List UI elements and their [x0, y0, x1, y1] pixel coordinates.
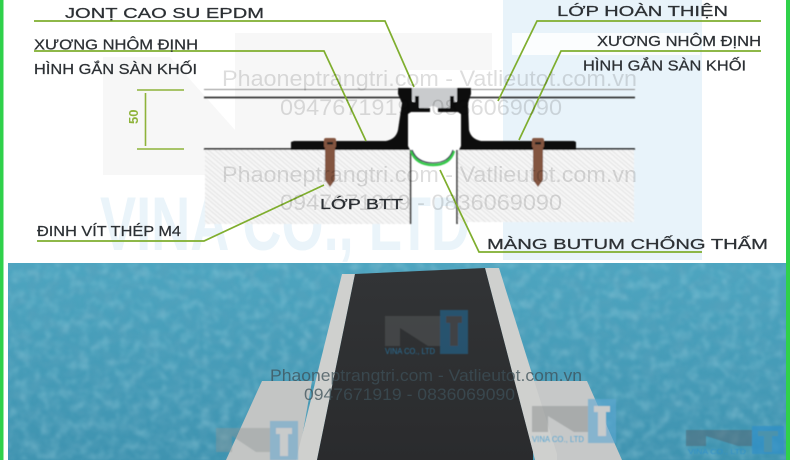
- diagram watermark text: Phaoneptrangtri.com - Vatlieutot.com.vn: [222, 162, 637, 187]
- aluminium strip right: [485, 268, 557, 460]
- background logo watermark: VINA CO., LTD: [100, 182, 470, 267]
- label: aluminium profile right line 2: HÌNH GẮN SÀN KHỐI: [583, 56, 746, 74]
- logo lower middle: VINA CO., LTD: [532, 435, 584, 444]
- black rubber insert: [317, 268, 533, 460]
- label: finish layer: LỚP HOÀN THIỆN: [557, 3, 728, 20]
- photo logos: [216, 310, 784, 460]
- photo watermark text: Phaoneptrangtri.com - Vatlieutot.com.vn: [270, 366, 582, 385]
- background logo watermark: [100, 0, 702, 267]
- finish layer lines right: [468, 90, 635, 149]
- EPDM rubber joint: [411, 88, 458, 108]
- screw right: [532, 138, 544, 187]
- logo on rubber: [385, 310, 468, 356]
- aluminium base plate right: [518, 381, 622, 460]
- concrete slab left: [205, 150, 410, 224]
- diagram watermark text: 0947671919 - 0836069090: [280, 190, 562, 215]
- label: aluminium profile right line 1: XƯƠNG NHÔM ĐỊNH: [597, 33, 761, 50]
- logo lower right: VINA CO., LTD: [688, 449, 746, 456]
- aluminium strip left: [296, 274, 355, 460]
- logo on rubber: VINA CO., LTD: [385, 347, 435, 356]
- label: aluminium profile left line 1: XƯƠNG NHÔM ĐỊNH: [34, 36, 198, 54]
- concrete slab right: [457, 150, 634, 222]
- carpet background: [8, 263, 786, 460]
- logo lower right: [686, 426, 784, 456]
- waterproof membrane: [411, 150, 454, 165]
- dimension 50: [126, 90, 184, 149]
- logo lower middle: [532, 399, 616, 444]
- technical section diagram: [204, 88, 635, 224]
- aluminium profile right: [438, 88, 576, 150]
- label: steel screw: ĐINH VÍT THÉP M4: [37, 223, 181, 240]
- label: aluminium profile left line 2: HÌNH GẮN SÀN KHỐI: [34, 60, 197, 78]
- label: EPDM joint: JONṬ CAO SU EPDM: [65, 5, 264, 22]
- leader lines: [34, 21, 761, 252]
- photo watermark text: [270, 366, 582, 404]
- expansion gap walls: [410, 150, 457, 224]
- label: bitumen membrane: MÀNG BUTUM CHỐNG THẤM: [487, 235, 768, 253]
- diagram watermark text: [222, 66, 637, 215]
- dimension 50: 50: [126, 110, 141, 124]
- finish layer lines left: [204, 90, 400, 149]
- screw left: [324, 138, 336, 187]
- product photo: [8, 263, 786, 460]
- side border: left: [0, 0, 4, 460]
- aluminium base plate left: [226, 381, 312, 460]
- diagram watermark text: Phaoneptrangtri.com - Vatlieutot.com.vn: [222, 66, 637, 91]
- label: concrete layer: LỚP BTT: [320, 196, 403, 213]
- aluminium profile left: [291, 88, 430, 150]
- photo watermark text: 0947671919 - 0836069090: [304, 385, 515, 404]
- diagram watermark text: 0947671919 - 0836069090: [280, 95, 562, 120]
- logo lower left: [216, 421, 298, 460]
- side border: right: [786, 0, 790, 460]
